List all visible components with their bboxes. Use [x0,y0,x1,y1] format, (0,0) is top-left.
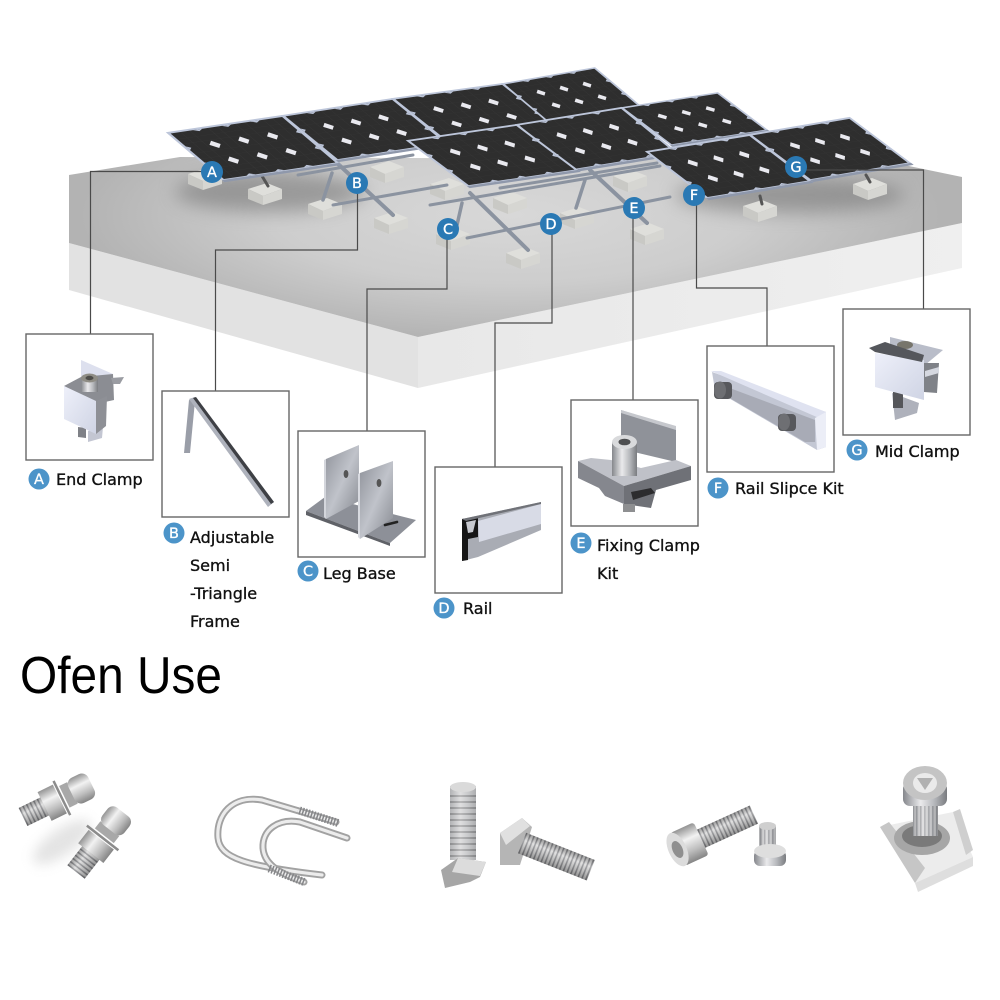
mounting frame: rails and triangle legs [262,155,870,250]
label: E Fixing Clamp Kit: E [576,536,586,552]
icon: U-bolts [218,799,347,882]
panel: B Adjustable Semi-Triangle Frame [162,391,289,517]
label: B Adjustable Semi-Triangle Frame: Frame [190,612,240,631]
panel: E Fixing Clamp Kit [571,400,698,526]
label: B Adjustable Semi-Triangle Frame: Semi [190,556,230,575]
label: A End Clamp [28,468,143,490]
diagram marker D: D [545,217,557,233]
diagram marker C [437,218,459,240]
diagram marker E [623,197,645,219]
diagram marker A: A [207,165,217,181]
panel: F Rail Slipce Kit [707,346,834,472]
icon: channel nut with socket screw [880,766,973,892]
label: E Fixing Clamp Kit: Kit [597,564,618,583]
label: B Adjustable Semi-Triangle Frame: -Triangle [190,584,257,603]
label: B Adjustable Semi-Triangle Frame: B [169,526,179,542]
label: A End Clamp: End Clamp [56,470,143,489]
leader lines [90,170,924,467]
label: B Adjustable Semi-Triangle Frame: Adjustable [190,528,274,547]
diagram marker F: F [690,188,698,204]
label: F Rail Slipce Kit: F [714,481,722,497]
heading: Ofen Use: Ofen Use [20,647,222,705]
diagram marker C: C [443,222,453,238]
label: G Mid Clamp: G [851,443,863,459]
diagram marker E: E [629,201,639,217]
label: E Fixing Clamp Kit [570,532,700,583]
icon: socket head cap screws [662,798,786,870]
diagram marker D [540,213,562,235]
label: E Fixing Clamp Kit: Fixing Clamp [597,536,700,555]
panel: D Rail [435,467,562,593]
panel: C Leg Base [298,431,425,557]
solar panels, middle array [406,92,770,188]
diagram marker F [683,184,705,206]
label: D Rail: D [438,601,450,617]
label: C Leg Base [298,560,396,583]
label: G Mid Clamp: Mid Clamp [875,442,960,461]
panel: A End Clamp [26,334,153,460]
diagram marker G [785,156,807,178]
solar panels, front array [645,117,914,200]
platform: concrete roof slab [69,157,962,388]
label: G Mid Clamp [846,440,960,461]
icon: hex bolts with washers [15,767,139,884]
label: C Leg Base: Leg Base [323,564,396,583]
label: F Rail Slipce Kit: Rail Slipce Kit [735,479,844,498]
diagram marker G: G [790,160,802,176]
diagram marker B: B [352,176,362,192]
label: D Rail [434,598,492,618]
panel: G Mid Clamp [843,309,970,435]
diagram marker B [346,172,368,194]
label: C Leg Base: C [303,564,313,580]
label: B Adjustable Semi-Triangle Frame [164,522,274,631]
solar panels, back array [166,67,643,182]
label: A End Clamp: A [34,472,44,488]
label: D Rail: Rail [463,599,492,618]
icon: T-head hammer bolts [441,782,595,888]
concrete ballast blocks [188,161,887,269]
diagram marker A [201,161,223,183]
